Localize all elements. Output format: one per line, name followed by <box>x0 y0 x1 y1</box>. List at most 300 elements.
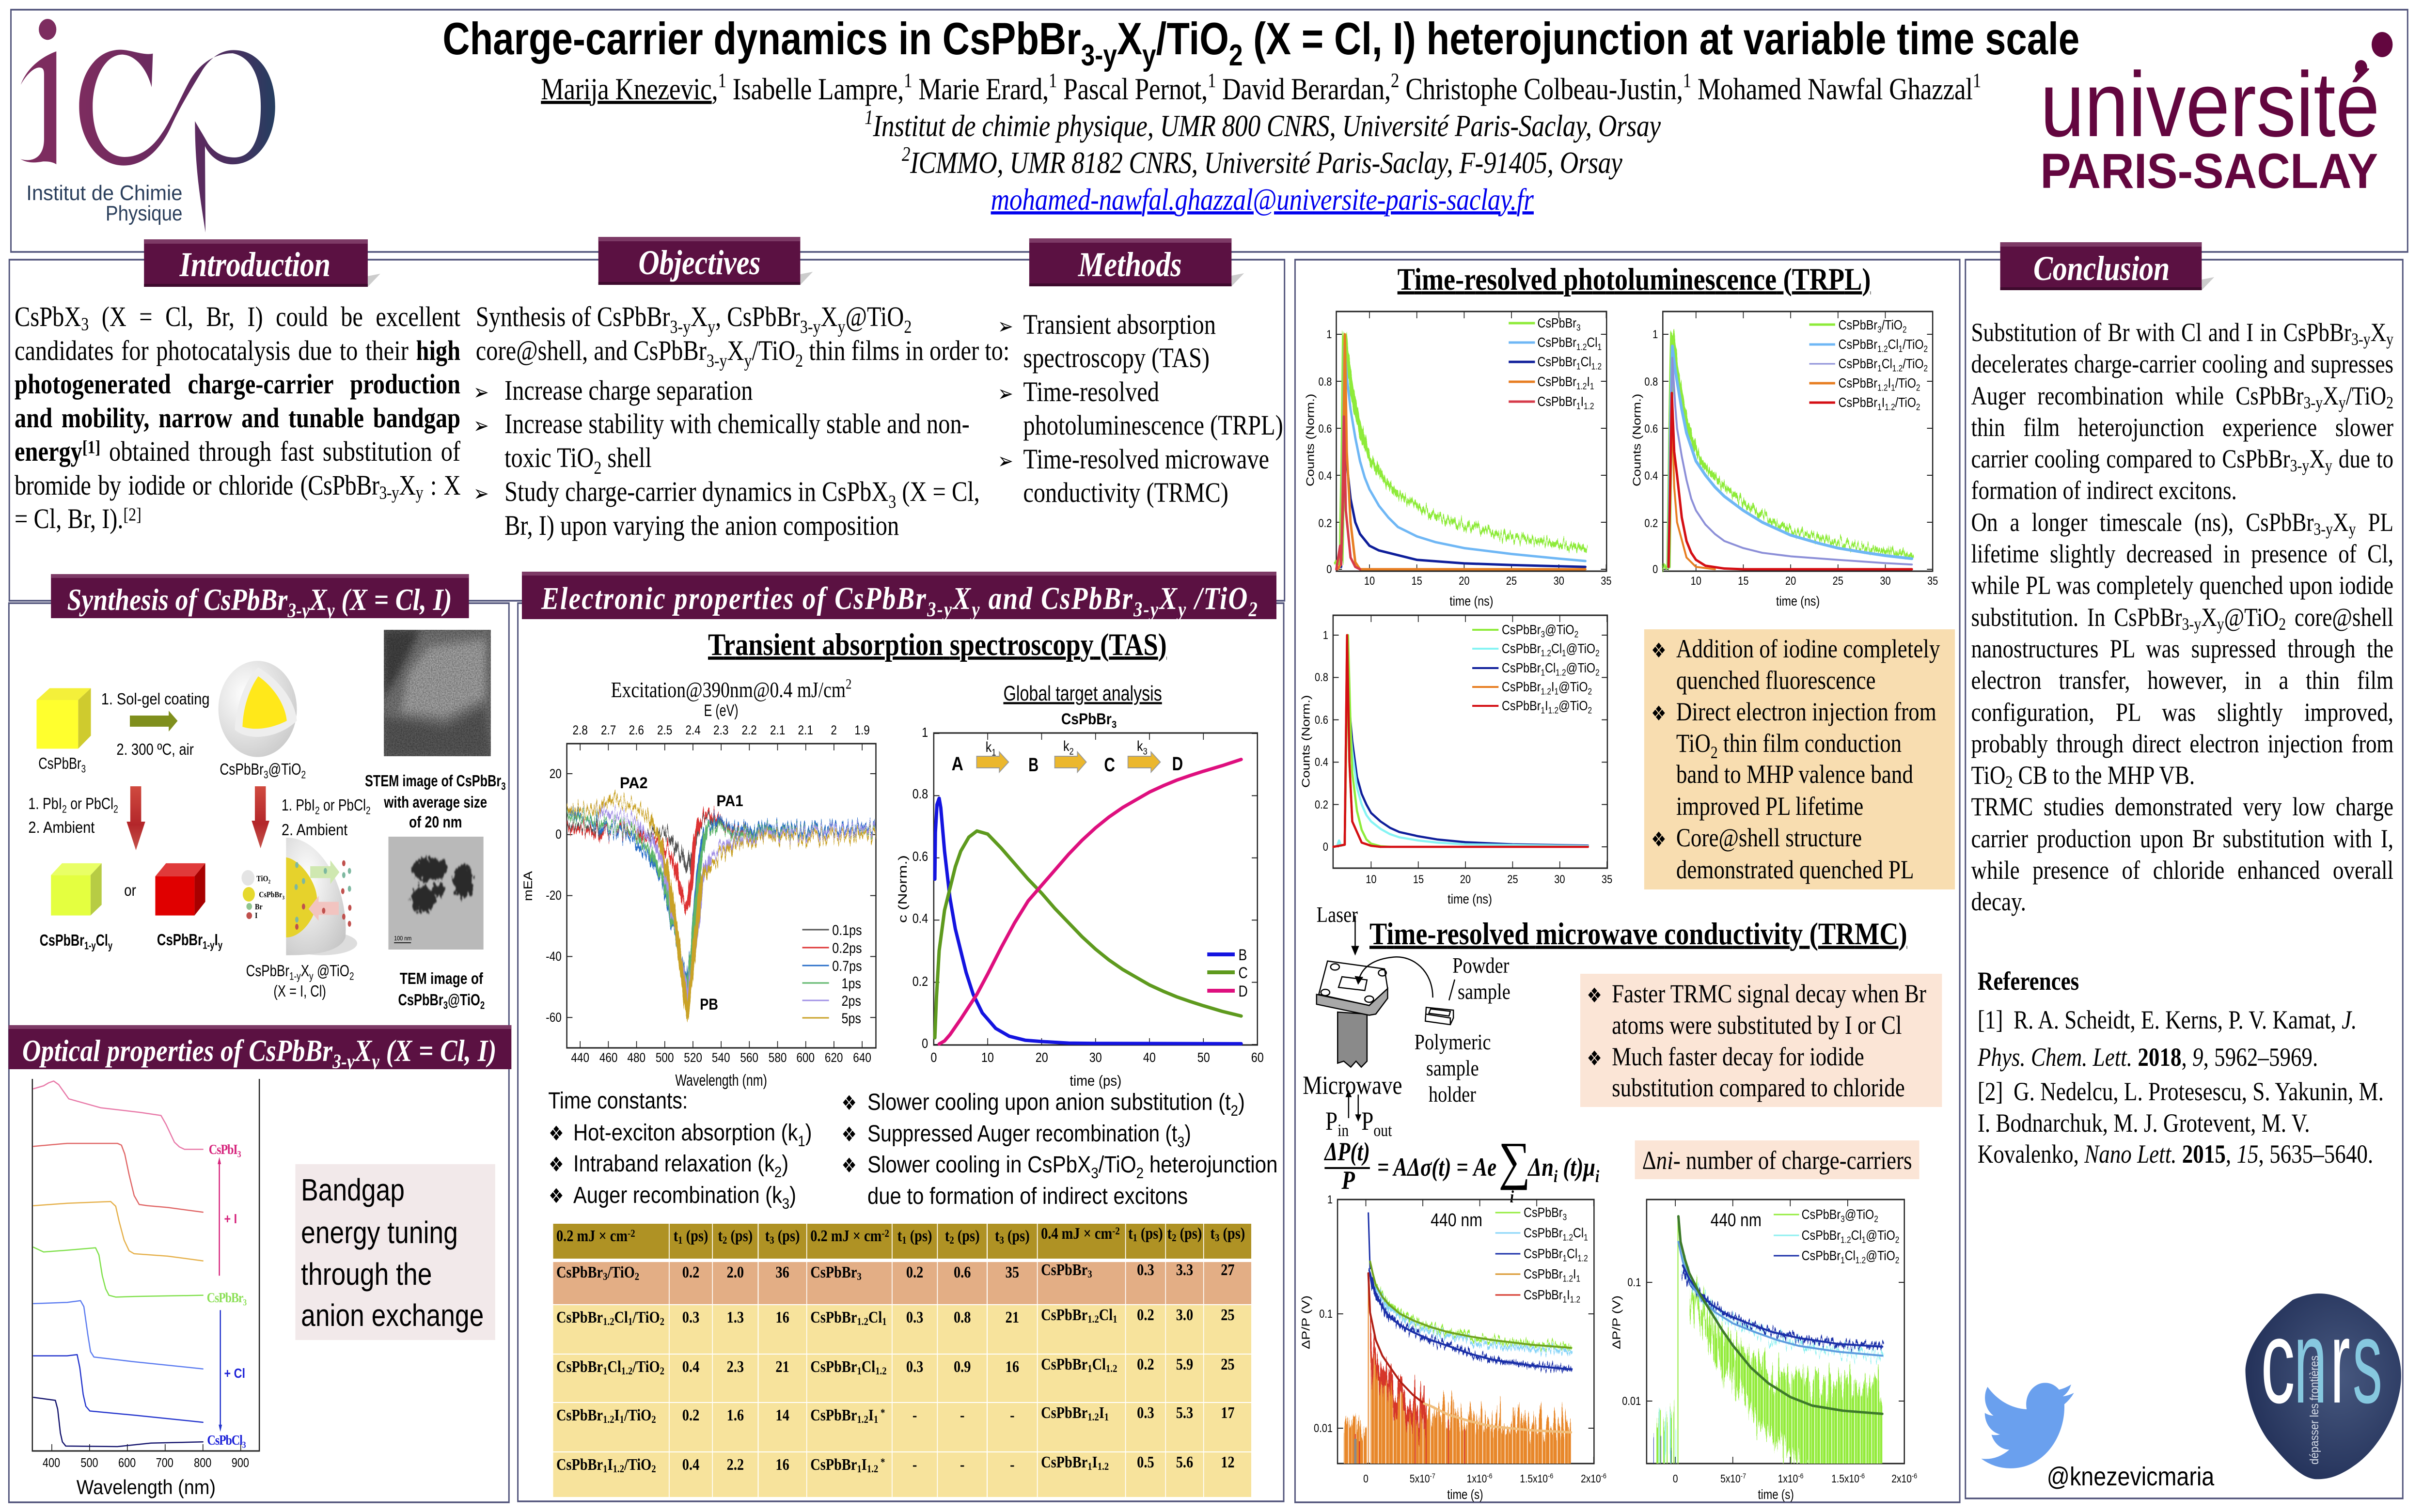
chart: TRPL of CsPbBr3-yXy: 25 <box>1506 574 1517 587</box>
image: TEM micrograph <box>388 837 484 950</box>
chart: species concentration kinetics: 10 <box>981 1050 994 1065</box>
table: time constants: 0.2 <box>906 1263 923 1281</box>
chart: transient absorption spectra: 2.6 <box>629 723 644 738</box>
chart: absorbance vs wavelength: 700 <box>156 1456 173 1470</box>
callout: TRMC findings <box>1580 974 1942 1107</box>
label: CsPbBr1-yIy: CsPbBr1-yIy <box>157 931 223 951</box>
legend: delay times: 0.2ps <box>832 940 862 956</box>
legend: TRMC core-shell series: CsPbBr1Cl1.2@TiO2 <box>1802 1248 1899 1265</box>
formula: TRMC signal: = AΔσ(t) = Ae <box>1377 1153 1496 1182</box>
label: left exchange step <box>28 795 118 837</box>
text: conclusion: decay. <box>1971 887 2026 916</box>
chart: TRPL of CsPbBr3-yXy/TiO2: 0.4 <box>1644 469 1658 482</box>
chart: TRPL of CsPbBr3-yXy@TiO2: 1 <box>1323 628 1328 641</box>
chart: TRMC of CsPbBr3-yXy@TiO2: 0.01 <box>1622 1394 1641 1407</box>
icon: Twitter bird <box>1981 1383 2074 1468</box>
chart: transient absorption spectra: 500 <box>656 1050 674 1065</box>
legend: TRMC series: CsPbBr1.2I1 <box>1524 1267 1580 1284</box>
label: right exchange step: 1. PbI2 or PbCl2 <box>282 796 371 817</box>
chart: TRPL of CsPbBr3-yXy/TiO2: time (ns) <box>1776 594 1820 609</box>
chart: TRPL of CsPbBr3-yXy/TiO2: 30 <box>1880 574 1891 587</box>
formula: TRMC signal: P <box>1341 1166 1355 1195</box>
legend: TRPL core-shell series: CsPbBr1.2I1@TiO2 <box>1502 680 1592 697</box>
text: time constants <box>548 1088 1277 1212</box>
references: J. <box>2342 1005 2357 1034</box>
text: introduction: candidates for photocatalysis due to their high <box>15 334 460 366</box>
chart: transient absorption spectra: PA1 <box>717 793 743 810</box>
chart: species concentration kinetics: 0.6 <box>913 849 928 864</box>
chart: species concentration kinetics: 20 <box>1036 1050 1048 1065</box>
table: time constants: t3 (ps) <box>995 1227 1030 1246</box>
chart: TRMC of CsPbBr3-yXy: 1 <box>1327 1193 1333 1206</box>
caption: TEM image: CsPbBr3@TiO2 <box>398 991 485 1012</box>
chart: absorbance vs wavelength: 500 <box>80 1456 98 1470</box>
table: time constants: 0.6 <box>954 1263 971 1281</box>
chart: species concentration kinetics: 40 <box>1143 1050 1156 1065</box>
legend: species <box>1207 947 1248 1000</box>
text: conclusion: Substitution of Br with Cl and I in CsPbBr3-yXy <box>1971 318 2393 349</box>
table: time constants: 27 <box>1221 1261 1235 1279</box>
diagram: microwave cavity setup: Pout <box>1361 1107 1392 1140</box>
callout: bandgap tuning: Bandgap <box>301 1173 405 1207</box>
text: conclusion: TiO2 CB to the MHP VB. <box>1971 761 2195 792</box>
callout: bandgap tuning: through the <box>301 1258 432 1292</box>
diagram: kinetic scheme: C <box>1104 754 1115 776</box>
table: time constants: t2 (ps) <box>945 1227 980 1246</box>
text: conclusion: decelerates charge-carrier cooling and supresses <box>1971 349 2393 378</box>
chart: transient absorption spectra <box>521 701 876 1090</box>
legend: TRPL series: CsPbBr3 <box>1537 316 1581 333</box>
diagram: microwave cavity setup: holder <box>1429 1082 1476 1107</box>
chart: absorbance vs wavelength: 400 <box>43 1456 60 1470</box>
table: time constants: 5.9 <box>1176 1356 1193 1373</box>
text: conclusion: formation of indirect excitons. <box>1971 476 2237 505</box>
text: objectives: ➢ <box>473 379 489 405</box>
caption: STEM image: of 20 nm <box>409 813 462 831</box>
text: objectives: ➢ <box>473 481 489 506</box>
label: Twitter handle: @knezevicmaria <box>2047 1462 2215 1491</box>
table: time constants: t3 (ps) <box>1211 1225 1245 1244</box>
legend: species: C <box>1239 965 1248 982</box>
chart: TRPL of CsPbBr3-yXy/TiO2: 15 <box>1738 574 1749 587</box>
chart: TRPL of CsPbBr3-yXy@TiO2: 0.6 <box>1315 713 1328 726</box>
chart: absorbance vs wavelength: 900 <box>232 1456 249 1470</box>
table: time constants: 0.8 <box>954 1309 971 1326</box>
table: time constants: t1 (ps) <box>897 1227 932 1246</box>
text: introduction: and mobility, narrow and tunable bandgap <box>15 402 460 433</box>
text: conclusion: TRMC studies demonstrated very low charge <box>1971 792 2393 821</box>
table: time constants: CsPbBr1.2I1 <box>1041 1404 1109 1423</box>
chart: transient absorption spectra: 2.7 <box>601 723 616 738</box>
heading: Electronic properties: Electronic properties of CsPbBr3-yXy and CsPbBr3-yXy /TiO2 <box>541 581 1258 621</box>
chart: TRPL of CsPbBr3-yXy/TiO2 <box>1631 312 1938 609</box>
label: coating step: 2. 300 ºC, air <box>116 741 194 759</box>
label: CsPbBr1-yCly: CsPbBr1-yCly <box>40 932 113 952</box>
diagram: microwave cavity setup: Powder <box>1452 953 1509 978</box>
chart: TRPL of CsPbBr3-yXy/TiO2: 0 <box>1652 562 1658 576</box>
table: time constants: 5.3 <box>1176 1404 1193 1422</box>
legend: TRMC series <box>1495 1205 1588 1305</box>
icon: core-shell sphere <box>219 661 297 757</box>
text: methods <box>998 309 1283 508</box>
diagram: synthesis scheme <box>28 630 506 1012</box>
chart: TRPL of CsPbBr3-yXy@TiO2: 0.8 <box>1315 670 1328 684</box>
diagram: microwave cavity setup: sample <box>1426 1056 1479 1081</box>
table: time constants: 0.9 <box>954 1358 971 1376</box>
logo: Université Paris-Saclay: université <box>2040 54 2380 156</box>
chart: TRMC of CsPbBr3-yXy@TiO2: 1.5x10-6 <box>1831 1471 1865 1485</box>
legend: TRPL series: CsPbBr1.2I1 <box>1537 374 1594 391</box>
legend: TRMC series: CsPbBr3 <box>1524 1205 1567 1222</box>
diagram: microwave cavity setup: Microwave <box>1303 1071 1402 1100</box>
callout: TRPL findings: TiO2 thin film conduction <box>1676 729 1902 763</box>
chart: absorbance vs wavelength: Wavelength (nm) <box>77 1476 216 1499</box>
label: global target analysis: Global target analysis <box>1003 681 1162 705</box>
chart: transient absorption spectra: 2.1 <box>798 723 813 738</box>
table: time constants: 0.4 mJ × cm-2 <box>1041 1225 1120 1243</box>
legend: delay times: 0.7ps <box>832 958 862 974</box>
text: time constants: ❖ <box>842 1092 857 1115</box>
legend: ion exchange <box>241 870 284 920</box>
callout: TRMC findings: ❖ <box>1587 984 1602 1008</box>
table: time constants: CsPbBr3 <box>810 1263 862 1282</box>
text: conclusion: probably through direct electron injection from <box>1971 729 2393 758</box>
legend: TRPL TiO2 series: CsPbBr3/TiO2 <box>1839 318 1907 335</box>
panel: title banner <box>11 10 2407 252</box>
chart: transient absorption spectra: 560 <box>740 1050 758 1065</box>
chart: transient absorption spectra: 540 <box>712 1050 730 1065</box>
heading: TAS: Transient absorption spectroscopy (TAS) <box>708 627 1167 662</box>
icon: iodide cube <box>155 863 205 916</box>
table: time constants: - <box>960 1456 964 1474</box>
chart: absorbance vs wavelength: CsPbBr3 <box>207 1290 247 1308</box>
chart: TRPL of CsPbBr3-yXy: Counts (Norm.) <box>1305 394 1317 486</box>
panel: conclusion <box>1966 242 2403 1498</box>
table: time constants: 0.3 <box>906 1358 923 1376</box>
text: objectives: core@shell, and CsPbBr3-yXy/TiO2 thin films in order to: <box>476 335 1009 371</box>
affiliation 2: 2ICMMO, UMR 8182 CNRS, Université Paris-Saclay, F-91405, Orsay <box>902 143 1623 180</box>
chart: TRPL of CsPbBr3-yXy@TiO2: 0.4 <box>1315 755 1328 768</box>
arrow: coating <box>130 711 178 732</box>
legend: ion exchange: TiO2 <box>256 874 270 885</box>
callout: TRMC findings: atoms were substituted by I or Cl <box>1612 1011 1902 1040</box>
table: time constants: 0.3 <box>1137 1404 1154 1422</box>
chart: TRMC of CsPbBr3-yXy@TiO2: time (s) <box>1758 1487 1794 1502</box>
chart: TRPL of CsPbBr3-yXy@TiO2: 0 <box>1323 840 1328 853</box>
logo: CNRS: n <box>2294 1296 2327 1428</box>
text: methods: Time-resolved microwave <box>1023 443 1269 475</box>
table: time constants: 0.3 <box>682 1309 699 1326</box>
chart: TRPL of CsPbBr3-yXy/TiO2: 0.2 <box>1644 516 1658 530</box>
callout: TRMC findings: substitution compared to chloride <box>1612 1073 1905 1102</box>
chart: absorbance vs wavelength: CsPbCl3 <box>207 1432 246 1450</box>
text: time constants: Suppressed Auger recombination (t 3) <box>867 1121 1191 1151</box>
callout: TRPL findings: Core@shell structure <box>1676 823 1862 852</box>
legend: TRPL core-shell series: CsPbBr3@TiO2 <box>1502 623 1578 639</box>
legend: TRMC core-shell series: CsPbBr3@TiO2 <box>1802 1207 1878 1224</box>
chart: absorbance vs wavelength <box>32 1079 259 1499</box>
heading: Methods: Methods <box>1078 246 1182 284</box>
text: time constants: ❖ <box>549 1122 564 1145</box>
legend: delay times: 5ps <box>842 1010 861 1027</box>
chart: TRPL of CsPbBr3-yXy@TiO2: 25 <box>1507 873 1518 886</box>
diagram: kinetic scheme: B <box>1028 754 1038 776</box>
legend: TRMC series: CsPbBr1.2Cl1 <box>1524 1226 1588 1243</box>
text: time constants: Slower cooling upon anion substitution (t 2) <box>867 1090 1245 1119</box>
formula: TRMC signal <box>1324 1131 1599 1207</box>
logo: Institut de Chimie Physique: Institut de Chimie <box>26 181 183 205</box>
icon: CsPbBr3 cube <box>36 688 91 748</box>
references: G. Nedelcu, L. Protesescu, S. Yakunin, M. <box>2014 1077 2384 1106</box>
heading: Optical properties: Optical properties of CsPbBr3-yXy (X = Cl, I) <box>22 1033 496 1073</box>
logo: CNRS: r <box>2330 1296 2350 1428</box>
chart: TRMC of CsPbBr3-yXy: ΔP/P (V) <box>1300 1295 1312 1349</box>
chart: species concentration kinetics <box>896 711 1264 1090</box>
chart: TRPL of CsPbBr3-yXy/TiO2: Counts (Norm.) <box>1631 394 1643 486</box>
references: References <box>1978 966 2079 996</box>
text: methods: spectroscopy (TAS) <box>1023 342 1210 374</box>
chart: transient absorption spectra: -20 <box>546 888 562 903</box>
caption: TEM image: TEM image of <box>400 970 484 988</box>
chart: TRPL of CsPbBr3-yXy: time (ns) <box>1449 594 1493 609</box>
chart: transient absorption spectra: 580 <box>769 1050 787 1065</box>
label: excitation conditions: Excitation@390nm@0.4 mJ/cm2 <box>611 676 851 702</box>
table: time constants: 0.2 <box>1137 1306 1154 1324</box>
chart: transient absorption spectra: -60 <box>546 1010 562 1025</box>
table: time constants: 14 <box>775 1406 789 1424</box>
chart: absorbance vs wavelength: 800 <box>194 1456 211 1470</box>
table: time constants: 1.6 <box>727 1406 744 1424</box>
text: time constants: due to formation of indirect excitons <box>867 1184 1188 1209</box>
callout: TRPL findings: band to MHP valence band <box>1676 760 1913 789</box>
image: STEM micrograph <box>384 630 491 756</box>
text: introduction <box>15 300 460 537</box>
legend: delay times: 0.1ps <box>832 922 862 938</box>
chart: TRPL of CsPbBr3-yXy@TiO2: 30 <box>1554 873 1565 886</box>
legend: ion exchange: CsPbBr3 <box>259 890 284 901</box>
logo: CNRS <box>2245 1294 2401 1479</box>
table: time constants: 16 <box>1006 1358 1019 1376</box>
text: conclusion: On a longer timescale (ns), CsPbBr3-yXy PL <box>1971 508 2393 539</box>
text: methods: ➢ <box>998 313 1013 339</box>
legend: TRMC core-shell series <box>1774 1207 1899 1265</box>
text: introduction: CsPbX3 (X = Cl, Br, I) could be excellent <box>15 301 460 334</box>
arrow: right exchange <box>252 786 269 848</box>
image: TEM micrograph: 100 nm <box>394 935 411 942</box>
text: conclusion: thin film heterojunction experience slower <box>1971 413 2393 442</box>
title: Charge-carrier dynamics in CsPbBr3-yXy/TiO2 (X = Cl, I) heterojunction at variable time scale <box>442 14 2079 72</box>
formula: TRMC signal: ΔP(t) <box>1324 1137 1370 1166</box>
chart: TRPL of CsPbBr3-yXy <box>1305 312 1612 609</box>
references: [2] <box>1978 1077 2003 1106</box>
text: methods: Transient absorption <box>1023 309 1216 340</box>
chart: TRMC of CsPbBr3-yXy: 1x10-6 <box>1467 1471 1493 1485</box>
legend: TRMC series: CsPbBr1Cl1.2 <box>1524 1247 1588 1263</box>
authors: Marija Knezevic,1 Isabelle Lampre,1 Marie Erard,1 Pascal Pernot,1 David Berardan,2 Christophe Colbeau-Justin,1 Mohamed Nawfal Ghazzal1 <box>541 69 1981 106</box>
table: time constants <box>552 1223 1251 1497</box>
caption: STEM image: STEM image of CsPbBr3 <box>365 772 506 793</box>
chart: TRPL of CsPbBr3-yXy@TiO2: 15 <box>1413 873 1424 886</box>
table: time constants: - <box>1010 1406 1015 1424</box>
chart: TRPL of CsPbBr3-yXy/TiO2: 20 <box>1785 574 1796 587</box>
heading: Conclusion: Conclusion <box>2033 249 2170 288</box>
chart: TRMC of CsPbBr3-yXy: 440 nm <box>1431 1210 1482 1231</box>
table: time constants: CsPbBr1I1.2 <box>1041 1453 1109 1472</box>
chart: transient absorption spectra: PB <box>700 996 718 1013</box>
chart: species concentration kinetics: 50 <box>1197 1050 1210 1065</box>
chart: TRPL of CsPbBr3-yXy: 15 <box>1412 574 1422 587</box>
chart: species concentration kinetics: 30 <box>1089 1050 1102 1065</box>
table: time constants: 36 <box>775 1263 789 1281</box>
contact email: mohamed-nawfal.ghazzal@universite-paris-saclay.fr <box>991 182 1534 217</box>
table: time constants: 25 <box>1221 1306 1235 1324</box>
diagram: microwave cavity setup: sample <box>1458 980 1510 1004</box>
chart: TRMC of CsPbBr3-yXy@TiO2: 1x10-6 <box>1778 1471 1804 1485</box>
table: time constants: CsPbBr1Cl1.2 <box>810 1358 887 1377</box>
affiliation 1: 1Institut de chimie physique, UMR 800 CNRS, Université Paris-Saclay, Orsay <box>865 106 1661 143</box>
diagram: microwave cavity setup <box>1303 903 1510 1140</box>
text: conclusion: while presence of chloride enhanced overall <box>1971 856 2393 885</box>
text: conclusion: while PL was completely quenched upon iodide <box>1971 571 2393 600</box>
table: time constants: 12 <box>1221 1453 1235 1471</box>
chart: transient absorption spectra: 520 <box>684 1050 702 1065</box>
diagram: kinetic scheme: D <box>1172 753 1183 775</box>
chart: TRMC of CsPbBr3-yXy: 5x10-7 <box>1410 1471 1435 1485</box>
legend: TRPL series <box>1509 316 1602 411</box>
chart: TRMC of CsPbBr3-yXy: 1.5x10-6 <box>1520 1471 1553 1485</box>
callout: TRMC findings: Much faster decay for iodide <box>1612 1042 1864 1071</box>
table: time constants: 0.3 <box>906 1309 923 1326</box>
diagram: kinetic scheme: k3 <box>1137 738 1148 756</box>
caption: TEM image <box>398 970 485 1012</box>
chart: TRPL of CsPbBr3-yXy/TiO2: 35 <box>1927 574 1938 587</box>
table: time constants: t1 (ps) <box>1128 1225 1163 1244</box>
text: conclusion: carrier production upon Br substitution with I, <box>1971 824 2393 853</box>
chart: transient absorption spectra: 480 <box>627 1050 645 1065</box>
callout: bandgap tuning: anion exchange <box>301 1299 484 1333</box>
chart: TRPL of CsPbBr3-yXy: 1 <box>1326 327 1332 341</box>
chart: transient absorption spectra: 0 <box>555 827 562 842</box>
arrow: left exchange <box>126 786 145 850</box>
references <box>1977 966 2384 1169</box>
chart: transient absorption spectra: 2.3 <box>713 723 728 738</box>
text: conclusion: Auger recombination while CsPbBr3-yXy/TiO2 <box>1971 381 2393 412</box>
text: introduction: bromide by iodide or chloride (CsPbBr3-yXy : X <box>15 469 460 503</box>
chart: TRMC of CsPbBr3-yXy: 0.1 <box>1319 1307 1333 1320</box>
legend: delay times: 1ps <box>842 975 861 992</box>
chart: TRMC of CsPbBr3-yXy: 0 <box>1363 1473 1369 1485</box>
text: conclusion: electron transfer, however, in a thin film <box>1971 666 2393 695</box>
chart: TRPL of CsPbBr3-yXy@TiO2: time (ns) <box>1448 892 1492 907</box>
logo: Institut de Chimie Physique: Physique <box>106 201 183 225</box>
label: CsPbBr1-yXy@TiO2: CsPbBr1-yXy @TiO2 <box>246 962 354 982</box>
table: time constants: - <box>1010 1456 1015 1474</box>
chart: TRPL of CsPbBr3-yXy: 0.2 <box>1319 516 1332 530</box>
legend: TRPL TiO2 series <box>1809 318 1928 412</box>
logo: Université Paris-Saclay: PARIS-SACLAY <box>2040 143 2378 199</box>
chart: species concentration kinetics: 0.8 <box>913 787 928 802</box>
callout: bandgap tuning: energy tuning <box>301 1216 458 1250</box>
legend: species: D <box>1239 983 1248 1000</box>
text: conclusion: substitution. In CsPbBr3-yXy@TiO2 core@shell <box>1971 603 2393 634</box>
chart: species concentration kinetics: 0.4 <box>913 911 928 926</box>
callout: TRPL findings: improved PL lifetime <box>1676 792 1863 821</box>
label: left exchange step: 1. PbI2 or PbCl2 <box>28 795 118 815</box>
caption: STEM image <box>365 772 506 831</box>
legend: species: B <box>1239 947 1247 964</box>
text: time constants: ❖ <box>549 1153 564 1176</box>
label: CsPbBr3: CsPbBr3 <box>38 755 86 775</box>
text: conclusion <box>1971 317 2393 922</box>
panel: synthesis and optical properties <box>9 574 511 1502</box>
table: time constants: CsPbBr1.2Cl1 <box>810 1309 887 1327</box>
chart: transient absorption spectra: Wavelength (nm) <box>675 1072 767 1090</box>
chart: transient absorption spectra: mEA <box>521 871 535 901</box>
text: time constants: Time constants: <box>548 1088 688 1114</box>
table: time constants: 25 <box>1221 1356 1235 1373</box>
chart: transient absorption spectra: 20 <box>550 766 562 781</box>
chart: species concentration kinetics: CsPbBr 3 <box>1061 711 1117 731</box>
icon: anion exchange in core-shell <box>286 838 357 955</box>
table: time constants: CsPbBr1.2Cl1 <box>1041 1306 1117 1325</box>
heading: Synthesis: Synthesis of CsPbBr3-yXy (X = Cl, I) <box>67 582 452 622</box>
heading: Introduction <box>144 239 380 287</box>
chart: transient absorption spectra: 1.9 <box>854 723 870 738</box>
text: conclusion: lifetime slightly decreased in presence of Cl, <box>1971 539 2393 568</box>
text: objectives <box>473 301 1009 541</box>
table: time constants: CsPbBr1.2I1/TiO2 <box>556 1406 656 1425</box>
legend: ion exchange: Br <box>255 903 263 911</box>
text: methods: conductivity (TRMC) <box>1023 477 1228 508</box>
table: time constants: 0.2 <box>682 1406 699 1424</box>
label: right exchange step: 2. Ambient <box>282 821 348 839</box>
chart: transient absorption spectra: 2.2 <box>742 723 757 738</box>
table: time constants: t2 (ps) <box>718 1227 753 1246</box>
icon: chloride cube <box>51 863 102 916</box>
legend: TRPL core-shell series: CsPbBr1.2Cl1@TiO2 <box>1502 641 1600 658</box>
text: objectives: toxic TiO2 shell <box>504 442 652 478</box>
chart: transient absorption spectra: 440 <box>571 1050 589 1065</box>
label: coating step: 1. Sol-gel coating <box>101 690 209 708</box>
table: time constants: 2.3 <box>727 1358 744 1376</box>
chart: species concentration kinetics: 1 <box>922 725 928 740</box>
heading: Objectives: Objectives <box>638 244 761 282</box>
chart: TRPL of CsPbBr3-yXy@TiO2: 10 <box>1366 873 1376 886</box>
text: objectives: ➢ <box>473 413 489 438</box>
text: objectives: Study charge-carrier dynamics in CsPbX3 (X = Cl, <box>504 476 980 512</box>
table: time constants: 16 <box>775 1309 789 1326</box>
table: time constants: 0.3 <box>1137 1261 1154 1279</box>
callout: TRMC findings: ❖ <box>1587 1047 1602 1071</box>
text: introduction: energy[1] obtained through fast substitution of <box>15 436 460 467</box>
legend: TRPL TiO2 series: CsPbBr1.2I1/TiO2 <box>1839 376 1920 393</box>
chart: TRMC of CsPbBr3-yXy@TiO2: ΔP/P (V) <box>1611 1295 1623 1349</box>
table: time constants: - <box>960 1406 964 1424</box>
text: conclusion: carrier cooling compared to CsPbBr3-yXy due to <box>1971 444 2393 475</box>
references: [1] <box>1978 1005 2003 1034</box>
diagram: kinetic scheme: A <box>952 753 963 775</box>
logo: Institut de Chimie Physique <box>20 19 275 233</box>
chart: transient absorption spectra: 2.1 <box>770 723 785 738</box>
formula: TRMC signal: i <box>1510 1187 1514 1207</box>
panel: electronic properties <box>518 572 1284 1501</box>
text: methods: ➢ <box>998 448 1013 474</box>
formula: TRMC signal: ∑ <box>1498 1131 1530 1190</box>
chart: TRPL of CsPbBr3-yXy/TiO2: 1 <box>1652 327 1658 341</box>
legend: TRPL TiO2 series: CsPbBr1.2Cl1/TiO2 <box>1839 337 1928 354</box>
table: time constants: 0.2 mJ × cm-2 <box>810 1227 889 1245</box>
chart: TRMC of CsPbBr3-yXy@TiO2 <box>1611 1200 1917 1502</box>
